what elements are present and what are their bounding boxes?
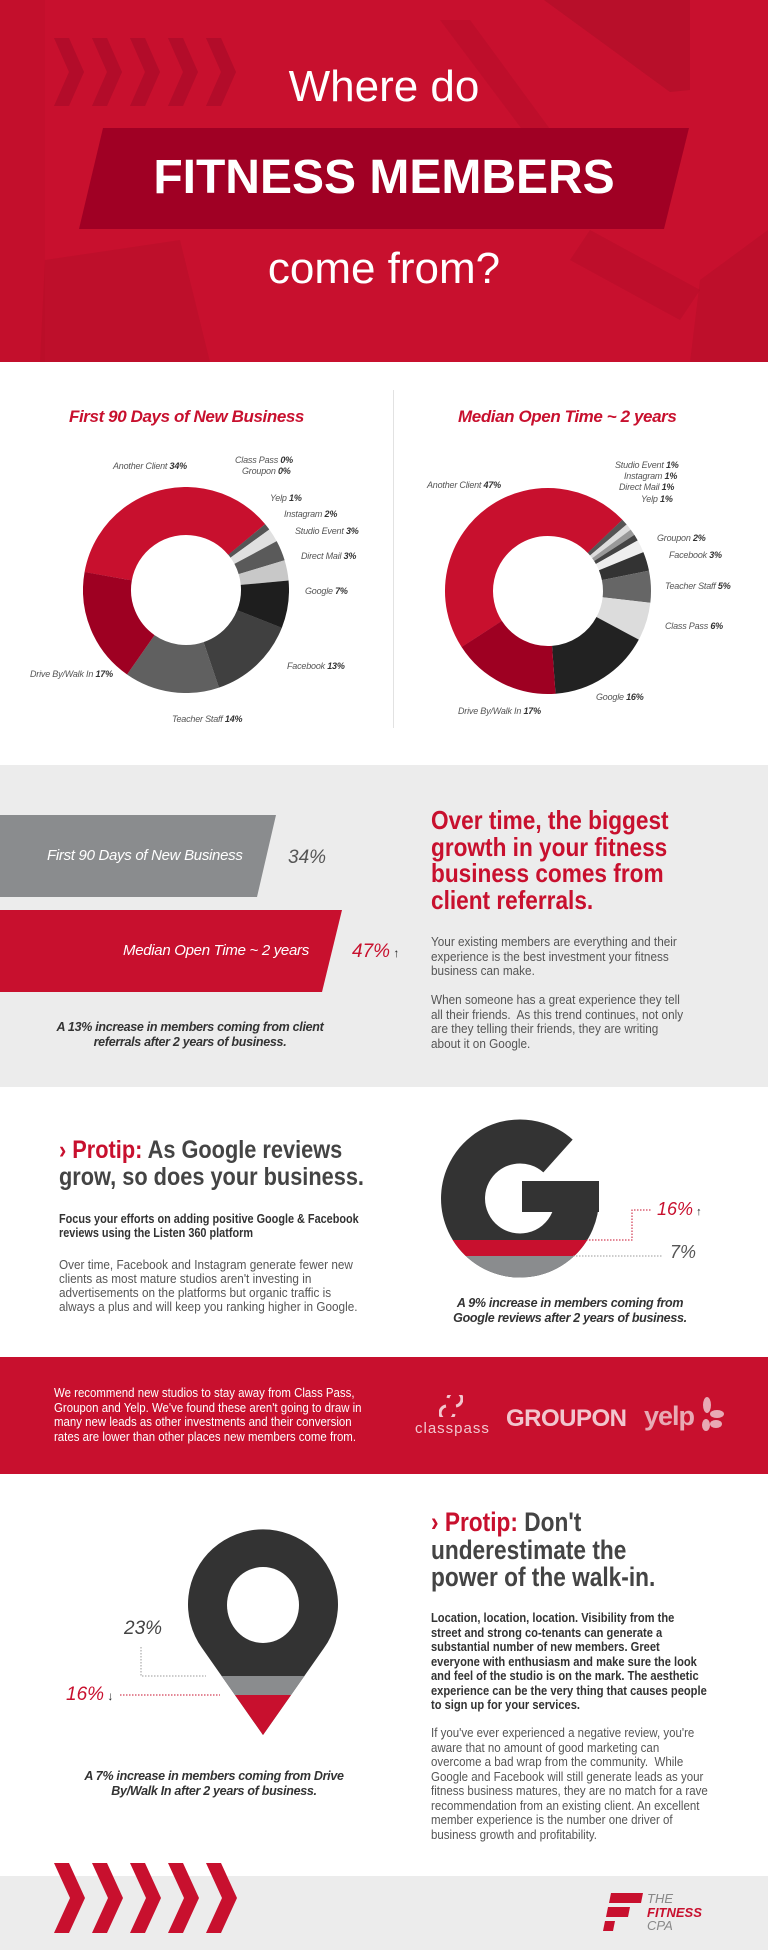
- value: google 16%: 16% ↑: [657, 1199, 702, 1219]
- chart title: median: Median Open Time ~ 2 years: [458, 407, 676, 426]
- caption: 9% increase: [453, 1296, 687, 1325]
- text: walk-in body: recommendation from an existing client. An excellent: [431, 1798, 699, 1812]
- heading: over time: Over time, the biggest: [431, 805, 669, 835]
- heading: over time: growth in your fitness: [431, 832, 667, 862]
- text: referral body: all their friends. As this trend continues, not only: [431, 1008, 683, 1022]
- chart labels: median: Class Pass 6%: [665, 621, 723, 631]
- chart labels: median: Yelp 1%: [641, 494, 673, 504]
- bar: median open time: Median Open Time ~ 2 years: [123, 942, 309, 959]
- text: Google 7%: [305, 586, 348, 596]
- chart title: first 90 days: First 90 Days of New Business: [69, 407, 304, 426]
- text: focus bold: reviews using the Listen 360 platform: [59, 1226, 253, 1240]
- text: walk-in bold: to sign up for your services.: [431, 1698, 580, 1712]
- caption: 13% increase: A 13% increase in members coming from client: [56, 1020, 324, 1034]
- heading: protip google: grow, so does your business.: [59, 1163, 364, 1191]
- text: google body: Over time, Facebook and Instagram generate fewer new: [59, 1258, 353, 1272]
- chart labels: first 90 days: Groupon 0%: [242, 466, 291, 476]
- text: referral body: business can make.: [431, 964, 535, 978]
- logo: yelp: yelp: [644, 1401, 694, 1431]
- title banner: fitness members: [79, 128, 689, 229]
- text: referral body: experience is the best investment your fitness: [431, 950, 669, 964]
- caption: 13% increase: [56, 1020, 324, 1049]
- text: Direct Mail 3%: [301, 551, 356, 561]
- caption: 7% increase: By/Walk In after 2 years of business.: [111, 1784, 317, 1798]
- icon: google G: [441, 1120, 662, 1278]
- text: walk-in bold: experience can be the very thing that causes people: [431, 1684, 707, 1698]
- caption: 7% increase: A 7% increase in members coming from Drive: [84, 1769, 344, 1783]
- text: walk-in body: business growth and profitability.: [431, 1828, 597, 1842]
- text: walk-in bold: street and strong co-tenants can generate a: [431, 1626, 662, 1640]
- chart labels: median: Instagram 1%: [624, 471, 677, 481]
- logo: yelp: [644, 1397, 724, 1431]
- logo: the fitness cpa: [603, 1891, 702, 1933]
- logo: classpass: [415, 1395, 490, 1437]
- caption: 9% increase: A 9% increase in members coming from: [457, 1296, 683, 1310]
- chart labels: median: Drive By/Walk In 17%: [458, 706, 541, 716]
- chart labels: first 90 days: Yelp 1%: [270, 493, 302, 503]
- value: 34%: 34%: [288, 847, 326, 868]
- value: google 7%: 7%: [670, 1242, 696, 1262]
- chart labels: median: Groupon 2%: [657, 533, 706, 543]
- panel: referral growth: [0, 765, 768, 1087]
- text: referral body: Your existing members are everything and their: [431, 935, 677, 949]
- value: 47% up: 47% ↑: [352, 941, 399, 962]
- chart labels: first 90 days: Class Pass 0%: [235, 455, 293, 465]
- title banner: fitness members: FITNESS MEMBERS: [153, 151, 615, 204]
- text: walk-in body: aware that no amount of good marketing can: [431, 1740, 659, 1754]
- value: pin 23%: 23%: [124, 1618, 162, 1639]
- chart labels: median: Google 16%: [596, 692, 644, 702]
- text: walk-in bold: substantial number of new members. Greet: [431, 1640, 660, 1654]
- bar: median open time: [0, 910, 342, 992]
- text: Studio Event 3%: [295, 526, 359, 536]
- chart labels: first 90 days: Another Client 34%: [113, 461, 187, 471]
- bar: first 90 days: First 90 Days of New Business: [47, 847, 243, 864]
- text: focus bold: Focus your efforts on adding positive Google & Facebook: [59, 1212, 359, 1226]
- title: come from: come from?: [268, 244, 500, 293]
- text: referral body: [431, 935, 683, 1050]
- chart labels: first 90 days: Drive By/Walk In 17%: [30, 669, 113, 679]
- text: walk-in body: member experience is the number one driver of: [431, 1813, 673, 1827]
- chart labels: median: [426, 460, 731, 716]
- chart labels: median: Studio Event 1%: [615, 460, 679, 470]
- logo: the fitness cpa: CPA: [647, 1918, 673, 1933]
- icon: footer chevrons: [54, 1863, 237, 1933]
- icon: header chevrons: [54, 38, 236, 106]
- heading: over time: client referrals.: [431, 885, 593, 915]
- text: walk-in body: If you've ever experienced a negative review, you're: [431, 1726, 694, 1740]
- text: walk-in bold: [431, 1611, 707, 1712]
- caption: 13% increase: referrals after 2 years of business.: [94, 1035, 286, 1049]
- leader lines: pin: [120, 1647, 220, 1696]
- heading: protip walk-in: › Protip: Don't: [431, 1507, 581, 1537]
- text: walk-in body: fitness business matures, they are no match for a rave: [431, 1784, 708, 1798]
- text: google body: always a plus and will keep you ranking higher in Google.: [59, 1300, 358, 1314]
- heading: protip walk-in: [431, 1507, 655, 1592]
- panel: red recommendation band: [0, 1357, 768, 1474]
- heading: over time: business comes from: [431, 858, 664, 888]
- heading: protip google: [59, 1136, 364, 1191]
- logo: groupon: GROUPON: [506, 1405, 627, 1432]
- divider: [393, 390, 394, 728]
- logo: the fitness cpa: FITNESS: [647, 1904, 702, 1920]
- value: pin 16% down: 16% ↓: [66, 1684, 113, 1705]
- logo: the fitness cpa: THE: [647, 1891, 673, 1906]
- text: walk-in body: [431, 1726, 708, 1842]
- heading: over time: [431, 805, 669, 915]
- donut chart: median open time: [445, 488, 651, 694]
- title: where do: Where do: [289, 62, 479, 111]
- bar: first 90 days: [0, 815, 276, 897]
- heading: protip walk-in: power of the walk-in.: [431, 1562, 655, 1592]
- footer: [0, 1876, 768, 1950]
- text: recommendation: We recommend new studios to stay away from Class Pass,: [54, 1385, 355, 1400]
- text: referral body: about it on Google.: [431, 1036, 530, 1050]
- panel: google protip: [59, 1136, 364, 1314]
- text: walk-in bold: Location, location, location. Visibility from the: [431, 1611, 674, 1625]
- text: focus bold: [59, 1212, 359, 1240]
- text: recommendation: [54, 1385, 362, 1444]
- chart labels: first 90 days: Teacher Staff 14%: [172, 714, 242, 724]
- text: google body: advertisements on the platforms but organic traffic is: [59, 1286, 331, 1300]
- text: recommendation: Groupon and Yelp. We've found these aren't going to draw in: [54, 1400, 362, 1414]
- donut chart: first 90 days: [83, 487, 289, 693]
- chart labels: first 90 days: Facebook 13%: [287, 661, 345, 671]
- panel: donut charts: [69, 407, 676, 426]
- text: google body: [59, 1258, 358, 1314]
- chart labels: median: Teacher Staff 5%: [665, 581, 731, 591]
- header banner: [0, 0, 768, 362]
- caption: 9% increase: Google reviews after 2 years of business.: [453, 1311, 687, 1325]
- icon: map pin: [188, 1529, 338, 1735]
- chart labels: first 90 days: Instagram 2%: [284, 509, 337, 519]
- chart labels: median: Direct Mail 1%: [619, 482, 674, 492]
- caption: 7% increase: [84, 1769, 344, 1798]
- chart labels: median: Another Client 47%: [427, 480, 501, 490]
- text: walk-in body: Google and Facebook will still generate leads as your: [431, 1770, 703, 1784]
- text: walk-in body: overcome a bad wrap from the community. While: [431, 1755, 683, 1769]
- text: recommendation: rates are lower than other places new members come from.: [54, 1428, 356, 1444]
- chart labels: median: Facebook 3%: [669, 550, 722, 560]
- heading: protip google: › Protip: As Google reviews: [59, 1136, 342, 1164]
- text: referral body: are they telling their friends, they are writing: [431, 1022, 658, 1036]
- text: google body: clients as most mature studios aren't investing in: [59, 1272, 311, 1286]
- text: referral body: When someone has a great experience they tell: [431, 993, 680, 1007]
- heading: protip walk-in: underestimate the: [431, 1534, 626, 1564]
- text: walk-in bold: and feel of the studio is on the mark. The aesthetic: [431, 1669, 699, 1683]
- logo: classpass: classpass: [415, 1420, 490, 1437]
- chart labels: first 90 days: [30, 455, 359, 724]
- text: walk-in bold: everyone with enthusiasm and make sure the look: [431, 1654, 697, 1668]
- text: recommendation: many new leads as other investments and their conversion: [54, 1414, 352, 1429]
